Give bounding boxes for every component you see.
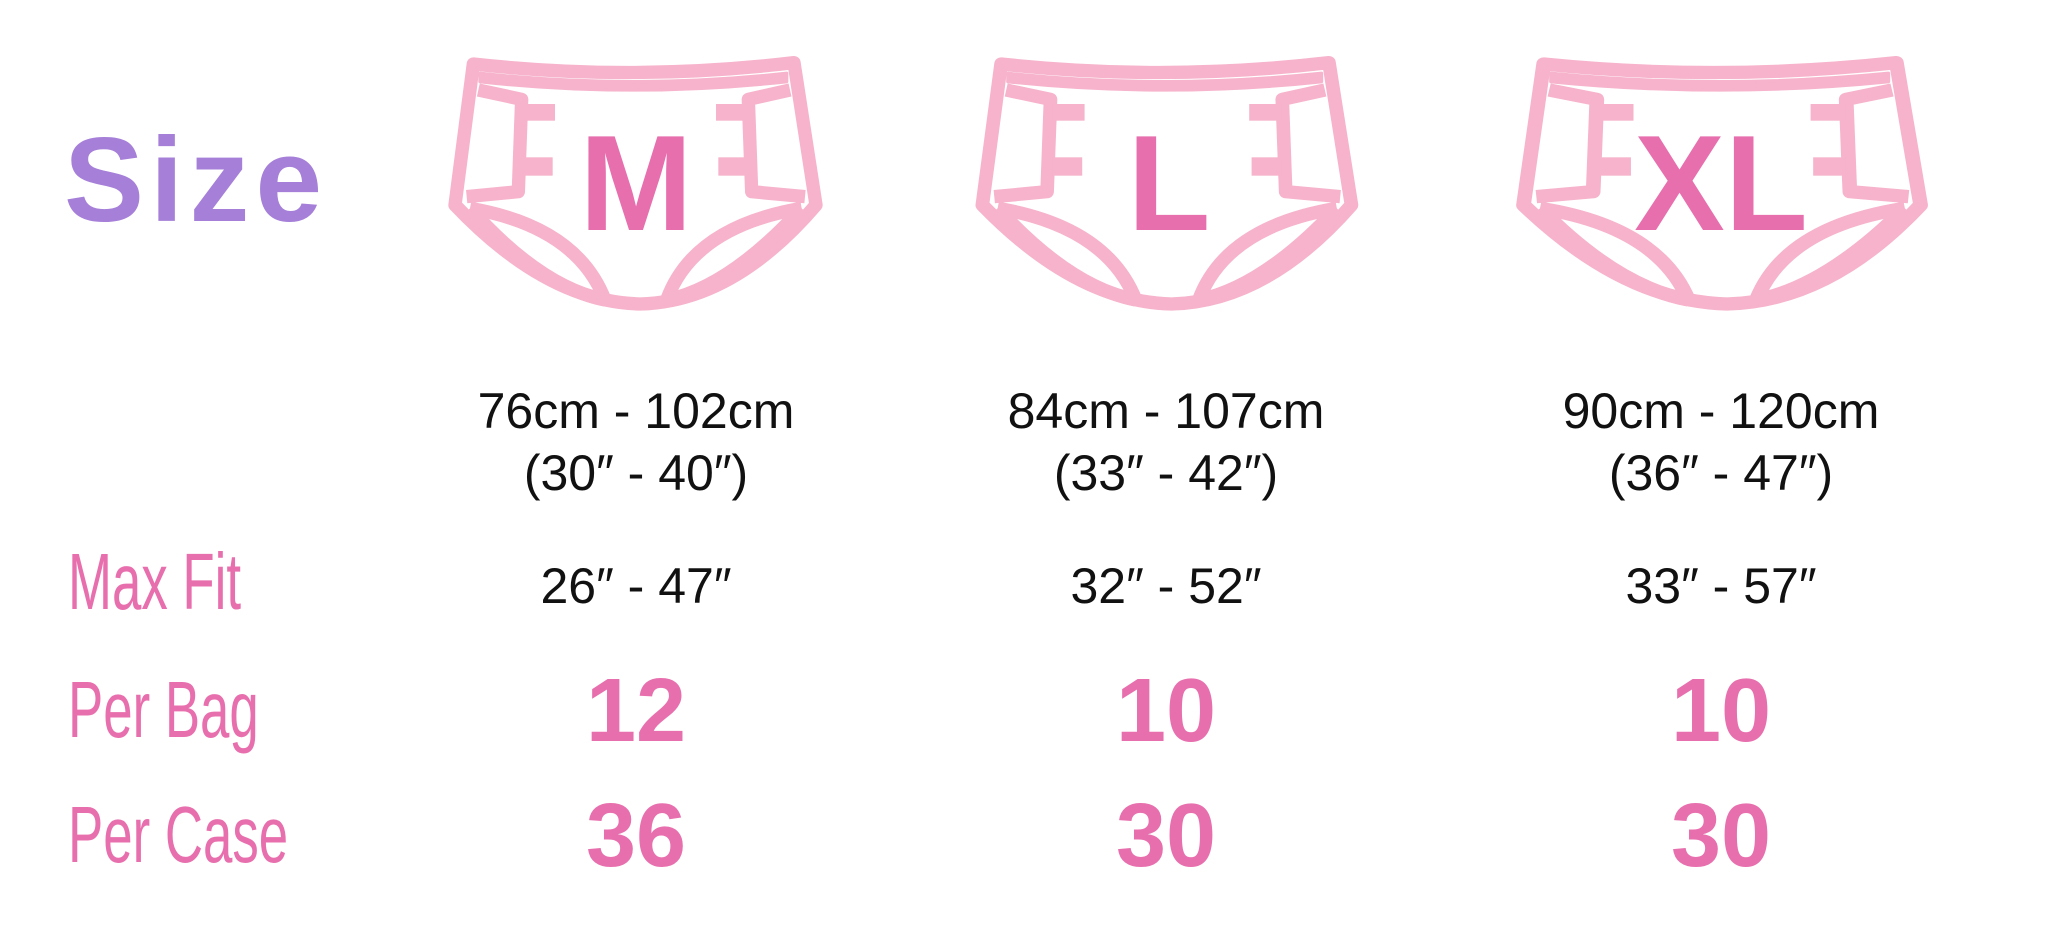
measurements XL	[1563, 383, 1879, 501]
per bag values: 12	[586, 661, 686, 761]
measurements M: (30″ - 40″)	[524, 445, 748, 501]
measurements M	[478, 383, 794, 501]
measurements L	[1008, 383, 1324, 501]
measurements XL: (36″ - 47″)	[1609, 445, 1833, 501]
icon: diaper L	[976, 56, 1358, 311]
measurements L: (33″ - 42″)	[1054, 445, 1278, 501]
measurements M: 76cm - 102cm	[478, 383, 794, 439]
measurements XL: 90cm - 120cm	[1563, 383, 1879, 439]
size letter XL: XL	[1634, 107, 1808, 259]
text: 30	[1116, 786, 1216, 886]
label: Max Fit: Max Fit	[68, 537, 241, 626]
icon: diaper M	[448, 56, 823, 311]
icon: diaper XL	[1516, 56, 1928, 311]
label: Per Case: Per Case	[68, 790, 288, 879]
measurements L: 84cm - 107cm	[1008, 383, 1324, 439]
text: 30	[1671, 786, 1771, 886]
size letter L: L	[1127, 107, 1211, 259]
label: Per Bag: Per Bag	[68, 665, 259, 754]
text: 10	[1671, 661, 1771, 761]
title: Size: Size	[64, 113, 328, 247]
text: 32″ - 52″	[1070, 558, 1262, 614]
per case values: 36	[586, 786, 686, 886]
text: 10	[1116, 661, 1216, 761]
max fit values: 26″ - 47″	[540, 558, 732, 614]
text: 33″ - 57″	[1625, 558, 1817, 614]
size letter M: M	[579, 107, 693, 259]
